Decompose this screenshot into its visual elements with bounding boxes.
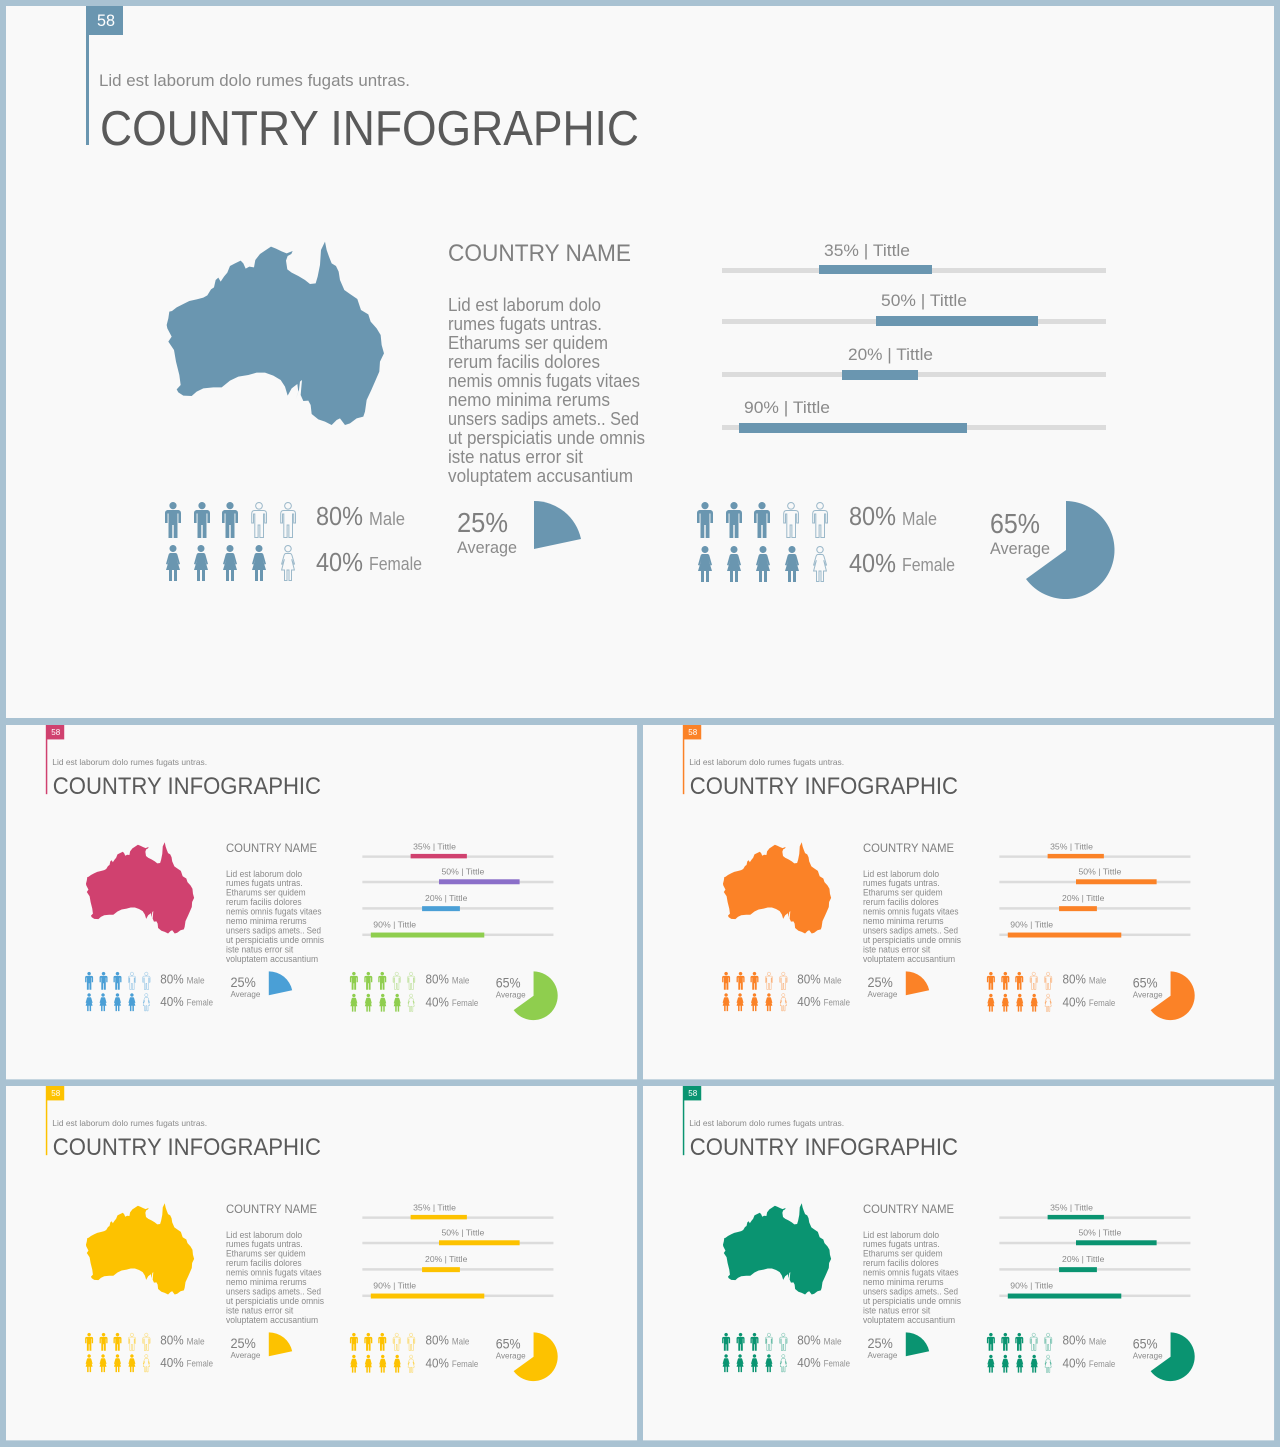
heading: country name: COUNTRY NAME xyxy=(448,240,631,267)
bar chart xyxy=(999,1202,1190,1299)
bar chart: 20% | Tittle xyxy=(425,1254,468,1264)
page number flag: 58 xyxy=(51,1088,61,1098)
bar chart xyxy=(722,241,1106,433)
stat: 25% average: 25% xyxy=(867,1335,893,1351)
stats right: 40% xyxy=(849,548,896,578)
stats left: Female xyxy=(369,554,422,574)
stat: 25% average: 25% xyxy=(230,974,256,990)
subtitle: Lid est laborum dolo rumes fugats untras. xyxy=(52,757,207,767)
text block: description: unsers sadips amets.. Sed xyxy=(226,1287,321,1297)
title: COUNTRY INFOGRAPHIC xyxy=(690,773,958,800)
title: COUNTRY INFOGRAPHIC xyxy=(690,1134,958,1161)
text block: description: nemis omnis fugats vitaes xyxy=(863,1268,959,1278)
bar chart xyxy=(999,841,1190,938)
text block: description: nemo minima rerums xyxy=(863,916,944,926)
bar chart: 50% | Tittle xyxy=(441,866,485,876)
bar chart: 90% | Tittle xyxy=(1010,1281,1053,1291)
stat: 65% average: 65% xyxy=(1133,974,1158,990)
icons: people left xyxy=(722,972,787,1011)
text block: description: nemo minima rerums xyxy=(226,1277,307,1287)
page number flag: 58 xyxy=(97,11,115,30)
bar chart: 50% | Tittle xyxy=(1078,866,1122,876)
heading: country name: COUNTRY NAME xyxy=(226,841,317,855)
stats right: Female xyxy=(902,555,955,575)
bar chart: 20% | Tittle xyxy=(425,893,468,903)
stats left: Male xyxy=(824,1336,842,1346)
stats right: Female xyxy=(452,1359,478,1369)
heading: country name: COUNTRY NAME xyxy=(863,841,954,855)
panel: small slide (multicolour) xyxy=(6,725,637,1079)
text block: description: voluptatem accusantium xyxy=(863,1315,955,1325)
icons: people right xyxy=(987,972,1052,1012)
text block: description: nemo minima rerums xyxy=(448,390,610,410)
bar chart: 20% | Tittle xyxy=(1062,893,1105,903)
stat: 25% average: Average xyxy=(457,538,517,557)
text block: description: iste natus error sit xyxy=(863,944,931,954)
text block: description xyxy=(863,869,962,964)
stat: 25% average xyxy=(230,1335,261,1360)
text block: description: nemo minima rerums xyxy=(863,1277,944,1287)
stat: 25% average: 25% xyxy=(457,507,508,538)
stats left: 40% xyxy=(316,547,363,577)
stats right xyxy=(426,1332,478,1371)
stat: 65% average xyxy=(496,974,526,1000)
page number flag xyxy=(46,725,64,739)
title accent line xyxy=(86,6,89,145)
pie chart: 25% xyxy=(269,971,292,995)
text block: description: Lid est laborum dolo xyxy=(226,869,302,879)
text block: description: Lid est laborum dolo xyxy=(226,1230,302,1240)
stats left: 80% xyxy=(160,1332,184,1347)
icons: people right xyxy=(697,502,828,582)
title accent line xyxy=(683,1086,684,1155)
bar chart xyxy=(362,1202,553,1299)
subtitle: Lid est laborum dolo rumes fugats untras. xyxy=(689,1118,844,1128)
text block: description: Etharums ser quidem xyxy=(226,888,306,898)
bar chart: 20% | Tittle xyxy=(848,345,933,364)
text block: description: voluptatem accusantium xyxy=(448,466,633,486)
subtitle: Lid est laborum dolo rumes fugats untras. xyxy=(99,71,410,90)
pie chart: 25% xyxy=(269,1332,292,1356)
stat: 25% average: 25% xyxy=(867,974,893,990)
stats right xyxy=(1063,1332,1115,1371)
bar chart: 35% | Tittle xyxy=(413,841,456,851)
stats left xyxy=(797,971,850,1009)
text block: description: ut perspiciatis unde omnis xyxy=(226,935,325,945)
stats right: 80% xyxy=(849,501,896,531)
text block: description: nemis omnis fugats vitaes xyxy=(226,1268,322,1278)
text block: description: nemis omnis fugats vitaes xyxy=(863,907,959,917)
stat: 25% average xyxy=(867,974,898,999)
stat: 65% average: Average xyxy=(1133,990,1163,1000)
stat: 25% average: Average xyxy=(867,989,898,999)
text block: description: unsers sadips amets.. Sed xyxy=(863,926,958,936)
stats right: 80% xyxy=(1063,1332,1086,1347)
bar chart: 35% | Tittle xyxy=(413,1202,456,1212)
text block: description: rerum facilis dolores xyxy=(863,1258,939,1268)
stats right xyxy=(1063,971,1115,1010)
text block: description: rumes fugats untras. xyxy=(226,1239,303,1249)
panel: small slide (teal) xyxy=(643,1086,1274,1440)
bar chart xyxy=(362,841,553,938)
bar chart: 90% | Tittle xyxy=(373,1281,416,1291)
stats right: Male xyxy=(452,975,469,985)
stats right: 80% xyxy=(1063,971,1086,986)
stat: 65% average: Average xyxy=(496,990,526,1000)
stat: 25% average: Average xyxy=(230,1350,261,1360)
stats left: Female xyxy=(824,1359,850,1369)
stats left: Male xyxy=(187,975,205,985)
icons: people right xyxy=(350,1333,415,1373)
bar chart: 50% | Tittle xyxy=(881,291,967,310)
pie chart: 65% xyxy=(514,1332,558,1381)
title accent line xyxy=(683,725,684,794)
stat: 65% average xyxy=(1133,1335,1163,1361)
icons: people left xyxy=(85,1333,150,1372)
stats left: 40% xyxy=(797,994,821,1009)
stats left: Male xyxy=(187,1336,205,1346)
stat: 25% average: Average xyxy=(230,989,261,999)
text block: description: ut perspiciatis unde omnis xyxy=(863,1296,962,1306)
title accent line xyxy=(46,1086,47,1155)
page number flag xyxy=(87,6,123,35)
text block: description: voluptatem accusantium xyxy=(226,954,318,964)
stats left: 80% xyxy=(797,971,821,986)
stats right: 40% xyxy=(426,995,449,1010)
page number flag: 58 xyxy=(51,727,61,737)
stat: 65% average xyxy=(496,1335,526,1361)
stat: 25% average: 25% xyxy=(230,1335,256,1351)
stats right: Male xyxy=(1089,975,1106,985)
stat: 65% average: Average xyxy=(496,1351,526,1361)
icons: people left xyxy=(165,502,296,581)
heading: country name: COUNTRY NAME xyxy=(863,1202,954,1216)
text block: description: rerum facilis dolores xyxy=(448,352,600,372)
stats left: Female xyxy=(187,998,213,1008)
stat: 65% average xyxy=(990,508,1050,558)
subtitle: Lid est laborum dolo rumes fugats untras. xyxy=(689,757,844,767)
text block: description: iste natus error sit xyxy=(226,1305,294,1315)
stats right: Female xyxy=(1089,998,1115,1008)
bar chart: 20% | Tittle xyxy=(1062,1254,1105,1264)
text block: description: Etharums ser quidem xyxy=(448,333,608,353)
title accent line xyxy=(46,725,47,794)
pie chart: 65% xyxy=(514,971,558,1020)
bar chart: 50% | Tittle xyxy=(441,1227,485,1237)
text block: description: ut perspiciatis unde omnis xyxy=(226,1296,325,1306)
text block: description xyxy=(226,869,325,964)
pie chart: 65% xyxy=(1151,971,1195,1020)
map: Australia xyxy=(86,842,194,934)
page number flag: 58 xyxy=(688,1088,698,1098)
map: Australia xyxy=(167,242,384,425)
text block: description: Etharums ser quidem xyxy=(863,1249,943,1259)
stats left: 80% xyxy=(316,501,363,531)
text block: description: Etharums ser quidem xyxy=(226,1249,306,1259)
stats left: 40% xyxy=(160,1355,184,1370)
bar chart: 35% | Tittle xyxy=(1050,841,1093,851)
text block: description: unsers sadips amets.. Sed xyxy=(863,1287,958,1297)
stats left: 40% xyxy=(797,1355,821,1370)
pie chart: 25% xyxy=(906,971,929,995)
panel: small slide (yellow) xyxy=(6,1086,637,1440)
title: COUNTRY INFOGRAPHIC xyxy=(53,1134,321,1161)
text block: description: nemo minima rerums xyxy=(226,916,307,926)
text block: description xyxy=(863,1230,962,1325)
stats left xyxy=(316,501,422,577)
stats right: 40% xyxy=(1063,995,1086,1010)
text block: description: rumes fugats untras. xyxy=(448,314,602,334)
bar chart: 90% | Tittle xyxy=(744,398,830,417)
pie chart: 25% xyxy=(534,501,581,549)
text block: description: rumes fugats untras. xyxy=(863,1239,940,1249)
text block: description: Lid est laborum dolo xyxy=(863,869,939,879)
stats left: Female xyxy=(187,1359,213,1369)
text block: description: rerum facilis dolores xyxy=(226,1258,302,1268)
text block: description: rumes fugats untras. xyxy=(226,878,303,888)
stats right xyxy=(426,971,478,1010)
stat: 65% average: 65% xyxy=(496,974,521,990)
stats left: 80% xyxy=(160,971,184,986)
stats right: Female xyxy=(452,998,478,1008)
text block: description: ut perspiciatis unde omnis xyxy=(863,935,962,945)
page number flag: 58 xyxy=(688,727,698,737)
panel: small slide (orange) xyxy=(643,725,1274,1079)
text block: description: iste natus error sit xyxy=(863,1305,931,1315)
title: COUNTRY INFOGRAPHIC xyxy=(100,102,639,156)
text block: description xyxy=(448,295,645,486)
subtitle: Lid est laborum dolo rumes fugats untras. xyxy=(52,1118,207,1128)
stats left: Male xyxy=(824,975,842,985)
stat: 25% average: Average xyxy=(867,1350,898,1360)
text block: description: unsers sadips amets.. Sed xyxy=(448,409,639,429)
stat: 65% average: Average xyxy=(990,539,1050,558)
pie chart: 65% xyxy=(1151,1332,1195,1381)
heading: country name: COUNTRY NAME xyxy=(226,1202,317,1216)
text block: description: rerum facilis dolores xyxy=(863,897,939,907)
text block: description: nemis omnis fugats vitaes xyxy=(448,371,640,391)
map: Australia xyxy=(723,1203,831,1295)
stats left xyxy=(160,1332,213,1370)
bar chart: 35% | Tittle xyxy=(1050,1202,1093,1212)
map: Australia xyxy=(86,1203,194,1295)
stats right: Male xyxy=(452,1336,469,1346)
stats right: Female xyxy=(1089,1359,1115,1369)
stats right: 40% xyxy=(426,1356,449,1371)
stats right: 80% xyxy=(426,971,449,986)
stats right: 80% xyxy=(426,1332,449,1347)
icons: people left xyxy=(722,1333,787,1372)
bar chart: 35% | Tittle xyxy=(824,241,910,260)
stats left: Female xyxy=(824,998,850,1008)
text block: description: rerum facilis dolores xyxy=(226,897,302,907)
stats right: Male xyxy=(1089,1336,1106,1346)
stat: 25% average xyxy=(230,974,261,999)
stat: 65% average: Average xyxy=(1133,1351,1163,1361)
stat: 65% average: 65% xyxy=(990,508,1040,539)
stat: 65% average xyxy=(1133,974,1163,1000)
icons: people right xyxy=(350,972,415,1012)
stat: 65% average: 65% xyxy=(496,1335,521,1351)
stats right: Male xyxy=(902,509,937,529)
text block: description: nemis omnis fugats vitaes xyxy=(226,907,322,917)
icons: people right xyxy=(987,1333,1052,1373)
text block: description: Lid est laborum dolo xyxy=(448,295,601,315)
map: Australia xyxy=(723,842,831,934)
text block: description: voluptatem accusantium xyxy=(863,954,955,964)
stat: 25% average xyxy=(457,507,517,557)
text block: description xyxy=(226,1230,325,1325)
stats left xyxy=(160,971,213,1009)
pie chart: 65% xyxy=(1026,501,1114,599)
bar chart: 50% | Tittle xyxy=(1078,1227,1122,1237)
icons: people left xyxy=(85,972,150,1011)
stats left: 40% xyxy=(160,994,184,1009)
text block: description: rumes fugats untras. xyxy=(863,878,940,888)
text block: description: Etharums ser quidem xyxy=(863,888,943,898)
text block: description: unsers sadips amets.. Sed xyxy=(226,926,321,936)
pie chart: 25% xyxy=(906,1332,929,1356)
page number flag xyxy=(46,1086,64,1100)
text block: description: voluptatem accusantium xyxy=(226,1315,318,1325)
stats left: Male xyxy=(369,509,405,529)
stats right: 40% xyxy=(1063,1356,1086,1371)
text block: description: Lid est laborum dolo xyxy=(863,1230,939,1240)
stat: 65% average: 65% xyxy=(1133,1335,1158,1351)
stat: 25% average xyxy=(867,1335,898,1360)
stats left: 80% xyxy=(797,1332,821,1347)
bar chart: 90% | Tittle xyxy=(1010,920,1053,930)
text block: description: iste natus error sit xyxy=(226,944,294,954)
text block: description: ut perspiciatis unde omnis xyxy=(448,428,645,448)
stats left xyxy=(797,1332,850,1370)
text block: description: iste natus error sit xyxy=(448,447,583,467)
title: COUNTRY INFOGRAPHIC xyxy=(53,773,321,800)
page number flag xyxy=(683,1086,701,1100)
page number flag xyxy=(683,725,701,739)
bar chart: 90% | Tittle xyxy=(373,920,416,930)
panel: main slide (blue) xyxy=(6,6,1274,718)
stats right xyxy=(849,501,955,578)
